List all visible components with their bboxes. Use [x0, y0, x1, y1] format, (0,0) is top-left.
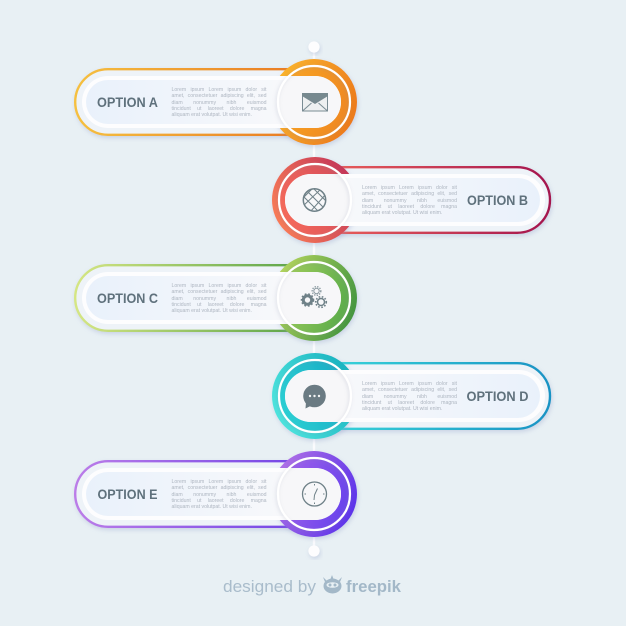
white inner pill [285, 174, 545, 226]
white inner pill [82, 76, 341, 128]
pill outline [75, 461, 325, 527]
coloured disc [271, 59, 357, 145]
text block: amet, consectetuer adipiscing elit, sed [362, 387, 457, 393]
icon: robot [323, 575, 342, 594]
text block: tincidunt ut laoreet dolore magna [172, 106, 266, 112]
text block [362, 185, 457, 216]
text block [172, 479, 266, 510]
timeline with end dots [308, 42, 322, 560]
text block: tincidunt ut laoreet dolore magna [362, 204, 457, 210]
panel: option D [272, 353, 554, 442]
icon: globe [302, 188, 326, 212]
white inner pill [82, 468, 341, 520]
icon: gears [302, 287, 326, 307]
text block: aliquam erat volutpat. Ut wisi enim. [172, 504, 252, 510]
text block: diam nonummy nibh euismod [172, 100, 266, 106]
text block: Lorem ipsum Lorem ipsum dolor sit [172, 87, 266, 93]
pill outline [300, 167, 550, 233]
text block: aliquam erat volutpat. Ut wisi enim. [362, 210, 442, 216]
panel: option B [272, 157, 554, 246]
heading: option B: OPTION B [467, 193, 528, 208]
text block [172, 283, 266, 314]
designed by text: designed by [223, 577, 317, 596]
text block: diam nonummy nibh euismod [172, 492, 266, 498]
heading: option D: OPTION D [466, 389, 529, 404]
text block: diam nonummy nibh euismod [362, 198, 457, 204]
text block: aliquam erat volutpat. Ut wisi enim. [172, 308, 252, 314]
text block [172, 87, 266, 118]
panel: option C [74, 255, 360, 344]
heading: option A: OPTION A [97, 95, 158, 110]
freepik wordmark: freepik [346, 577, 402, 596]
text block: tincidunt ut laoreet dolore magna [172, 498, 266, 504]
ring [275, 456, 352, 532]
pill outline [300, 363, 550, 429]
text block: diam nonummy nibh euismod [172, 296, 266, 302]
footer: designed by freepik [223, 575, 402, 596]
text block: aliquam erat volutpat. Ut wisi enim. [362, 406, 442, 412]
ring [277, 358, 352, 434]
icon: envelope [302, 93, 328, 111]
text block: amet, consectetuer adipiscing elit, sed [172, 289, 266, 295]
text block: amet, consectetuer adipiscing elit, sed [362, 191, 457, 197]
text block: Lorem ipsum Lorem ipsum dolor sit [362, 185, 457, 191]
coloured disc [271, 255, 357, 341]
text block: tincidunt ut laoreet dolore magna [362, 400, 457, 406]
panel: option A [74, 59, 360, 148]
white inner pill [285, 370, 545, 422]
pill outline [75, 69, 325, 135]
ring [276, 162, 352, 239]
ring [275, 64, 352, 141]
pill outline [75, 265, 325, 331]
text block: Lorem ipsum Lorem ipsum dolor sit [172, 283, 266, 289]
ring [275, 260, 352, 336]
panel: option E [74, 451, 360, 540]
coloured disc [272, 353, 358, 439]
text block: diam nonummy nibh euismod [362, 394, 457, 400]
text block [362, 381, 457, 412]
heading: option C: OPTION C [97, 291, 158, 306]
text block: Lorem ipsum Lorem ipsum dolor sit [172, 479, 266, 485]
icon: speech bubble [303, 385, 326, 408]
white inner pill [82, 272, 341, 324]
text block: amet, consectetuer adipiscing elit, sed [172, 485, 266, 491]
text block: Lorem ipsum Lorem ipsum dolor sit [362, 381, 457, 387]
text block: amet, consectetuer adipiscing elit, sed [172, 93, 266, 99]
coloured disc [272, 157, 358, 243]
heading: option E: OPTION E [98, 487, 158, 502]
text block: tincidunt ut laoreet dolore magna [172, 302, 266, 308]
text block: aliquam erat volutpat. Ut wisi enim. [172, 112, 252, 118]
coloured disc [271, 451, 357, 537]
icon: clock [302, 482, 326, 506]
